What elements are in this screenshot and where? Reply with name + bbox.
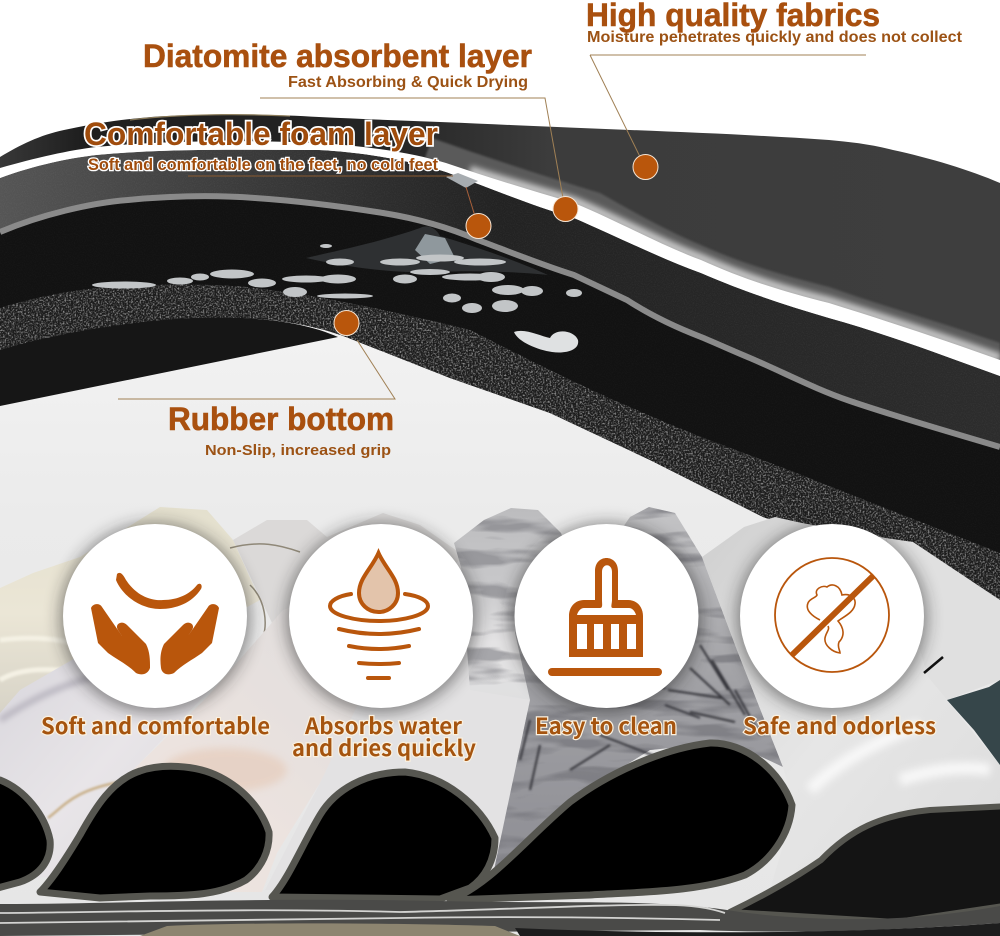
diatomite layer (0, 150, 1000, 447)
white right sheet (702, 517, 1000, 890)
text: Comfortable foam layer: Comfortable foam layer (84, 116, 438, 152)
heart-shaped water drop (514, 331, 578, 352)
hole 2 (40, 766, 269, 898)
hole 3 (272, 772, 495, 899)
text: High quality fabrics (586, 0, 962, 46)
text: Rubber bottom (168, 401, 394, 459)
white strips (0, 905, 725, 923)
feature: safe and odorless (740, 524, 924, 708)
text: Diatomite absorbent layer (143, 38, 532, 91)
lilac sheet over hole 1 (0, 640, 210, 880)
icon: brush (548, 558, 662, 676)
gold vein (48, 782, 120, 818)
text: Comfortable foam layer (84, 116, 438, 174)
layered mat cross-section (0, 114, 1000, 600)
second back sheet (233, 513, 470, 720)
gold highlight on top edge (130, 115, 290, 120)
pink marbling (163, 748, 287, 792)
label: Absorbs water and dries quickly: and dries quickly (292, 731, 476, 763)
bottom strips (0, 900, 1000, 936)
far right sheet (886, 538, 1000, 700)
back sheet veins (230, 544, 300, 640)
dark patch right (947, 680, 1000, 765)
marble rolled mats (0, 507, 1000, 936)
label: Soft and comfortable: Soft and comfortable (41, 709, 270, 741)
white band (0, 141, 1000, 376)
grey marble top left (454, 508, 575, 700)
text: Rubber bottom: Rubber bottom (168, 401, 394, 437)
rubber bottom speckled layer (0, 285, 1000, 600)
circle shadows (60, 523, 927, 713)
label: Absorbs water and dries quickly: Absorbs water (304, 709, 462, 741)
pink sheet over hole 2 (45, 590, 370, 892)
lilac band (0, 675, 100, 720)
right black underside (730, 806, 1000, 922)
icon: water drop with ripples (330, 553, 428, 678)
cream marble sheet (0, 507, 260, 720)
text: Comfortable foam layer: Soft and comfortable on the feet, no cold feet (88, 156, 438, 174)
hole 1 (0, 780, 50, 890)
dark marble strokes (520, 645, 760, 790)
icon: hands and crescent (91, 573, 219, 674)
grey band (454, 508, 575, 700)
icon: no odor (775, 558, 889, 672)
dark fold line (924, 657, 943, 673)
beige floor (140, 923, 520, 936)
text: Diatomite absorbent layer: Fast Absorbing & Quick Drying (288, 74, 528, 91)
label: Easy to clean: Easy to clean (535, 709, 677, 741)
foam layer black core (0, 196, 1000, 600)
hole 4 (450, 743, 792, 900)
grey marble mottling (494, 507, 783, 870)
top fabric layer (0, 114, 1000, 362)
text: Diatomite absorbent layer: Diatomite absorbent layer (143, 38, 532, 74)
text: High quality fabrics: Moisture penetrates quickly and does not collect (587, 29, 962, 46)
text: Rubber bottom: Non-Slip, increased grip (205, 442, 391, 459)
bottom dark strip (515, 923, 1000, 936)
label: Absorbs water and dries quickly (292, 709, 476, 763)
water droplets splash (92, 173, 582, 352)
feature: easy to clean (514, 524, 698, 708)
lower edge highlight of fabric (470, 170, 1000, 358)
feature: absorbs water (289, 524, 473, 708)
marker dots (334, 154, 658, 336)
cream veins (0, 638, 95, 680)
mid sheet (265, 560, 530, 890)
lighter band beneath crease (425, 138, 1000, 362)
rubber underside shadow (0, 318, 338, 406)
grey marble sheet (494, 507, 783, 870)
grey seam between diatomite and foam (0, 196, 1000, 447)
right sheet shading (810, 725, 990, 790)
label: Safe and odorless: Safe and odorless (743, 709, 936, 741)
feature: soft and comfortable (63, 524, 247, 708)
leader lines (118, 55, 866, 399)
